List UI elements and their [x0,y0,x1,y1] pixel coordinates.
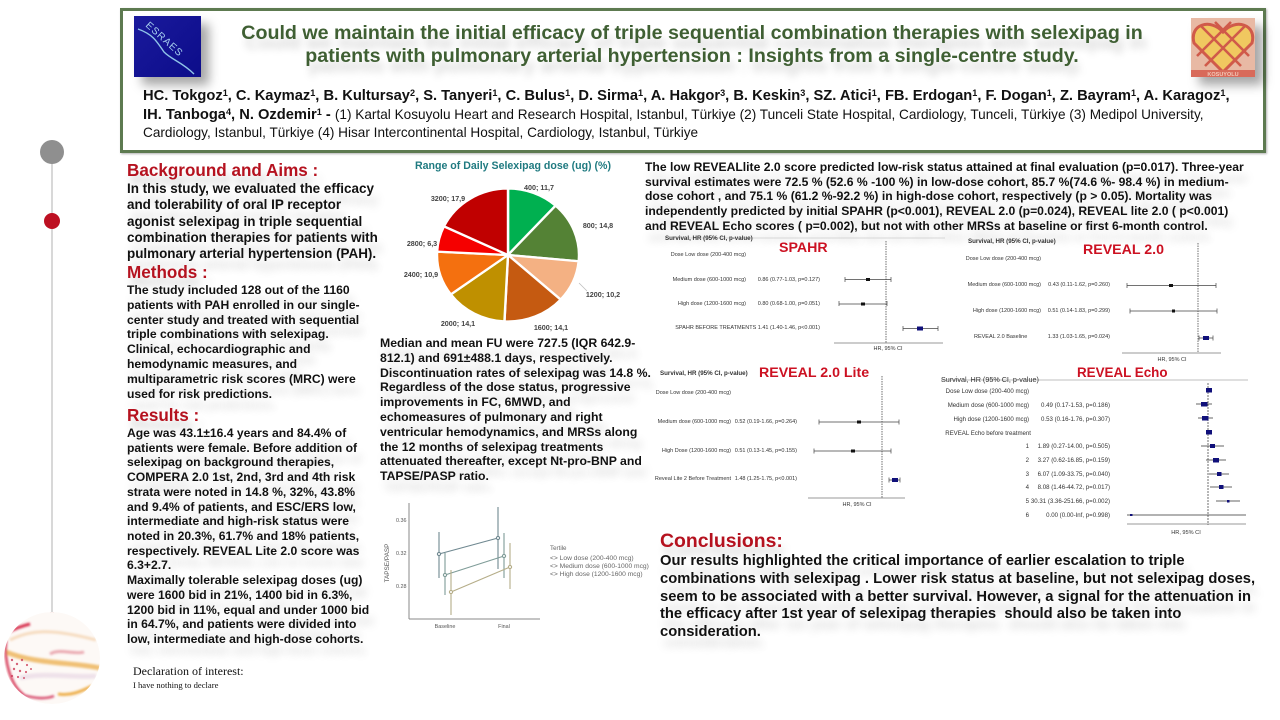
text: follow-up and discontinuation: echomeasures of pulmonary and right [380,410,603,424]
forest plot: REVEAL Echo: Survival, HR (95% CI, p-value) [941,375,1039,384]
forest plot: REVEAL Echo: 4 [1026,484,1030,491]
plot label: REVEAL Echo: REVEAL Echo [1077,365,1168,380]
pie title: Range of Daily Selexipag dose (ug) (%) [415,160,611,172]
text: results: intermediate and high-risk status were [127,514,349,528]
pie labels: 800; 14,8 [583,221,613,230]
logo: ESRAES society: ESRAES [143,20,185,59]
text: follow-up and discontinuation: attenuated thereafter, except Nt-pro-BNP and [380,454,642,468]
text: methods: hemodynamic measures, and [127,357,297,371]
line chart: TAPSE/PASP by dose: Final [498,624,510,630]
line chart: TAPSE/PASP by dose [384,503,649,630]
forest plot: REVEAL Echo: Dose Low dose (200-400 mcg) [946,388,1029,395]
text: conclusions: consideration. [660,624,761,640]
pie labels: 400; 11,7 [524,183,554,192]
chart legend: <> High dose (1200-1600 mcg) [550,571,643,578]
icon: grey node [40,140,64,164]
text: follow-up and discontinuation: the 12 months of selexipag treatments [380,440,603,454]
line chart: TAPSE/PASP by dose: 0.32 [396,551,406,557]
forest plot: REVEAL 2.0 Lite: Reveal Lite 2 Before Treatment [655,476,731,482]
forest plot: REVEAL 2.0: Survival, HR (95% CI, p-value) [968,238,1056,245]
forest plot: REVEAL Echo: 3.27 (0.62-16.85, p=0.159) [1038,457,1110,464]
text: background: In this study, we evaluated the efficacy [127,181,374,196]
text: methods: Clinical, echocardiographic and [127,342,311,356]
forest plot: REVEAL 2.0: Dose Low dose (200-400 mcg) [966,256,1041,262]
forest plot: REVEAL Echo: 3 [1026,471,1030,478]
forest plots [655,235,1248,536]
text: methods: center study and treated with sequential [127,313,359,327]
text: results: 1200 bid in 11%, equal and under 1000 bid [127,603,369,617]
icon: small red node [48,612,56,620]
text: conclusions: the efficacy after 1st year of selexipag therapies should also be taken into [660,606,1181,622]
icon: marbled planet [4,612,100,704]
text: results: noted in 20.3%, 61.7% and 18% patients, [127,529,359,543]
line chart: TAPSE/PASP by dose: Baseline [435,624,455,630]
text: results: Maximally tolerable selexipag doses (ug) [127,573,362,587]
forest plot: REVEAL Echo: 1.89 (0.27-14.00, p=0.505) [1038,443,1110,450]
forest plot: REVEAL Echo: REVEAL Echo before treatment [945,430,1031,437]
forest plot: SPAHR [665,235,945,352]
authors and affiliations: Cardiology, Istanbul, Türkiye (4) Hisar Intercontinental Hospital, Cardiology, Istanbul, Türkiye [143,125,698,140]
forest plot: SPAHR: Survival, HR (95% CI, p-value) [665,235,753,242]
chart legend: Tertile [550,545,567,552]
high dose series [449,543,512,615]
text: declaration of interest: Declaration of interest: [133,664,244,678]
plot label: REVEAL 2.0: REVEAL 2.0 [1083,242,1164,258]
forest plot: REVEAL Echo: 8.08 (1.46-44.72, p=0.017) [1038,484,1110,491]
forest plot: REVEAL Echo: 0.00 (0.00-Inf, p=0.998) [1046,512,1110,519]
text: methods: multiparametric risk scores (MRC) were [127,372,356,386]
text: background: and tolerability of oral IP receptor [127,197,341,212]
forest plot: REVEAL 2.0: Medium dose (600-1000 mcg) [968,282,1041,288]
forest plot: REVEAL 2.0: High dose (1200-1600 mcg) [973,308,1041,314]
text: results: 6.3+2.7. [127,558,171,572]
plot label: SPAHR: SPAHR [779,240,828,256]
header panel [120,8,1266,153]
title: patients with pulmonary arterial hypertension : Insights from a single-centre study. [305,45,1079,67]
forest plot: REVEAL 2.0 [966,238,1221,363]
pie labels: 3200; 17,9 [431,194,465,203]
logo: Kosuyolu heart [1191,18,1255,77]
forest plot: SPAHR: Dose Low dose (200-400 mcg) [671,252,746,258]
text: methods: The study included 128 out of the 1160 [127,283,350,297]
forest plot: REVEAL 2.0: REVEAL 2.0 Baseline [974,334,1027,340]
forest plot: REVEAL 2.0 Lite: 0.51 (0.13-1.45, p=0.155) [735,448,797,454]
chart legend [550,545,649,578]
forest plot: REVEAL 2.0 Lite: 1.48 (1.25-1.75, p<0.001) [735,476,797,482]
heading: background and aims: Background and Aims : [127,161,318,180]
pie labels: 2000; 14,1 [441,319,475,328]
plot label: REVEAL 2.0 Lite: REVEAL 2.0 Lite [759,365,869,381]
forest plot: SPAHR: 0.86 (0.77-1.03, p=0.127) [758,277,820,283]
text: background: combination therapies for patients with [127,230,378,245]
line chart: TAPSE/PASP by dose: TAPSE/PASP [384,544,391,582]
text: survival and risk prediction: dose cohort , and 75.1 % (61.2 %-92.2 %) in high-dose cohort, respectively (p > 0.05). Mortality was [645,189,1212,203]
text: conclusions: combinations with selexipag . Lower risk status at baseline, but not selexipag doses, [660,571,1255,587]
text: methods: triple combinations with selexipag. [127,327,329,341]
text: survival and risk prediction: survival estimates were 72.5 % (52.6 % -100 %) in low-dose cohort, 85.7 %(74.6 %- 98.4 %) in medium- [645,175,1229,189]
authors and affiliations: HC. Tokgoz1, C. Kaymaz1, B. Kultursay2, S. Tanyeri1, C. Bulus1, D. Sirma1, A. Hakgor3, B. Keskin3, SZ. Atici1, FB. Erdogan1, F. Dogan1, Z. Bayram1, A. Karagoz1, [143,88,1230,104]
text: results: low, intermediate and high-dose cohorts. [127,632,363,646]
forest plot: REVEAL 2.0: 1.33 (1.03-1.65, p=0.024) [1048,334,1110,340]
forest plot: REVEAL Echo: 30.31 (3.36-251.66, p=0.002) [1031,498,1110,505]
text: conclusions [660,553,1255,648]
forest plot: SPAHR: HR, 95% CI [873,346,903,352]
forest plot: REVEAL Echo: HR, 95% CI [1171,530,1201,536]
pie labels: 1600; 14,1 [534,323,568,332]
low dose series [437,507,500,578]
pie labels [404,183,620,332]
text: follow-up and discontinuation: ventricular hemodynamics, and MRSs along [380,425,637,439]
forest plot: REVEAL Echo: 2 [1026,457,1030,464]
text: results [127,426,372,656]
forest plot: REVEAL Echo: 0.49 (0.17-1.53, p=0.186) [1041,402,1110,409]
line chart: TAPSE/PASP by dose: 0.36 [396,518,406,524]
text: survival and risk prediction: independently predicted by initial SPAHR (p<0.001), REVEAL 2.0 (p=0.024), REVEAL lite 2.0 ( p<0.001) [645,204,1228,218]
forest plot: REVEAL 2.0 Lite: 0.52 (0.19-1.66, p=0.264) [735,419,797,425]
forest plot: REVEAL 2.0 Lite [655,370,905,508]
text: background [127,181,380,272]
text: results: strata were noted in 14.8 %, 32%, 43.8% [127,485,355,499]
decorative timeline with planet [4,140,100,704]
authors and affiliations: IH. Tanboga4, N. Ozdemir1 - (1) Kartal Kosuyolu Heart and Research Hospital, Istanbul, Türkiye (2) Tunceli State Hospital, Cardiology, Tunceli, Türkiye (3) Medipol University, [143,106,1204,123]
forest plot: REVEAL 2.0 Lite: High Dose (1200-1600 mcg) [662,448,731,454]
text: survival and risk prediction [645,160,1244,242]
forest plot: REVEAL Echo: 6.07 (1.09-33.75, p=0.040) [1038,471,1110,478]
pie labels: 2800; 6,3 [407,239,437,248]
text: declaration of interest: I have nothing to declare [133,680,218,690]
line chart: TAPSE/PASP by dose: 0.28 [396,584,406,590]
text: follow-up and discontinuation: Median and mean FU were 727.5 (IQR 642.9- [380,336,635,350]
forest plot: REVEAL 2.0: HR, 95% CI [1157,357,1187,363]
forest plot: REVEAL 2.0 Lite: HR, 95% CI [842,502,872,508]
chart legend: <> Low dose (200-400 mcg) [550,555,634,562]
icon: red node [44,213,60,229]
text: survival and risk prediction: The low REVEALlite 2.0 score predicted low-risk status attained at final evaluation (p=0.017). Three-year [645,160,1244,174]
text: background: agonist selexipag in triple sequential [127,214,362,229]
forest plot: REVEAL Echo: Medium dose (600-1000 mcg) [948,402,1029,409]
text: results: Age was 43.1±16.4 years and 84.4% of [127,426,346,440]
text: results: COMPERA 2.0 1st, 2nd, 3rd and 4th risk [127,470,355,484]
text: results: and 9.4% of patients, and ESC/ERS low, [127,500,356,514]
text: follow-up and discontinuation: 812.1) and 691±488.1 days, respectively. [380,351,613,365]
text: background: pulmonary arterial hypertension (PAH). [127,246,376,261]
pie labels: 1200; 10,2 [586,290,620,299]
heading: methods: Methods : [127,263,208,282]
logo: ESRAES society [134,16,201,77]
authors and affiliations [143,88,1230,140]
forest plot: SPAHR: 0.80 (0.68-1.00, p=0.051) [758,301,820,307]
pie slices [437,188,579,321]
text: follow-up and discontinuation: Regardless of the dose status, progressive [380,380,631,394]
text: follow-up and discontinuation: Discontinuation rates of selexipag was 14.8 %. [380,366,651,380]
forest plot: REVEAL Echo: 6 [1026,512,1030,519]
forest plot: REVEAL 2.0: 0.43 (0.11-1.62, p=0.260) [1048,282,1110,288]
heading: conclusions: Conclusions: [660,530,783,552]
forest plot: SPAHR: Medium dose (600-1000 mcg) [673,277,746,283]
forest plot: REVEAL 2.0: 0.51 (0.14-1.83, p=0.299) [1048,308,1110,314]
forest plot: REVEAL 2.0 Lite: Medium dose (600-1000 mcg) [658,419,731,425]
chart legend: <> Medium dose (600-1000 mcg) [550,563,649,570]
text: conclusions: seem to be associated with a better survival. However, a signal for the attenuation in [660,589,1251,605]
forest plot: REVEAL Echo [941,375,1248,536]
title: Could we maintain the initial efficacy of triple sequential combination therapies with selexipag in [241,22,1143,44]
heading: results: Results : [127,406,199,425]
forest plot: REVEAL Echo: 1 [1026,443,1030,450]
text: results: respectively. REVEAL Lite 2.0 score was [127,544,359,558]
text: follow-up and discontinuation: TAPSE/PASP ratio. [380,469,489,483]
text: methods: used for risk predictions. [127,387,272,401]
forest plot: SPAHR: SPAHR BEFORE TREATMENTS 1.41 (1.40-1.46, p<0.001) [675,325,820,331]
text: conclusions: Our results highlighted the critical importance of earlier escalation to triple [660,553,1185,569]
text: follow-up and discontinuation [380,336,651,492]
medium dose series [443,533,506,595]
text: results: in 64.7%, and patients were divided into [127,617,356,631]
text: declaration of interest [133,664,244,690]
text: methods [127,283,361,410]
text: follow-up and discontinuation: improvements in FC, 6MWD, and [380,395,571,409]
text: survival and risk prediction: and REVEAL Echo scores ( p=0.002), but not with other MRSs at baseline or first 6-month control. [645,219,1208,233]
forest plot: REVEAL 2.0 Lite: Dose Low dose (200-400 mcg) [656,390,731,396]
text: results: selexipag on background therapies, [127,455,334,469]
pie chart: range of daily selexipag dose [404,160,620,332]
text: results: were 1600 bid in 21%, 1400 bid in 6.3%, [127,588,352,602]
forest plot: REVEAL Echo: 5 [1026,498,1030,505]
forest plot: REVEAL Echo: High dose (1200-1600 mcg) [953,416,1029,423]
title [241,22,1146,76]
text: methods: patients with PAH enrolled in our single- [127,298,360,312]
forest plot: REVEAL Echo: 0.53 (0.16-1.76, p=0.307) [1041,416,1110,423]
forest plot: SPAHR: High dose (1200-1600 mcg) [678,301,746,307]
text: results: patients were female. Before addition of [127,441,357,455]
pie labels: 2400; 10,9 [404,270,438,279]
forest plot: REVEAL 2.0 Lite: Survival, HR (95% CI, p-value) [660,370,748,377]
